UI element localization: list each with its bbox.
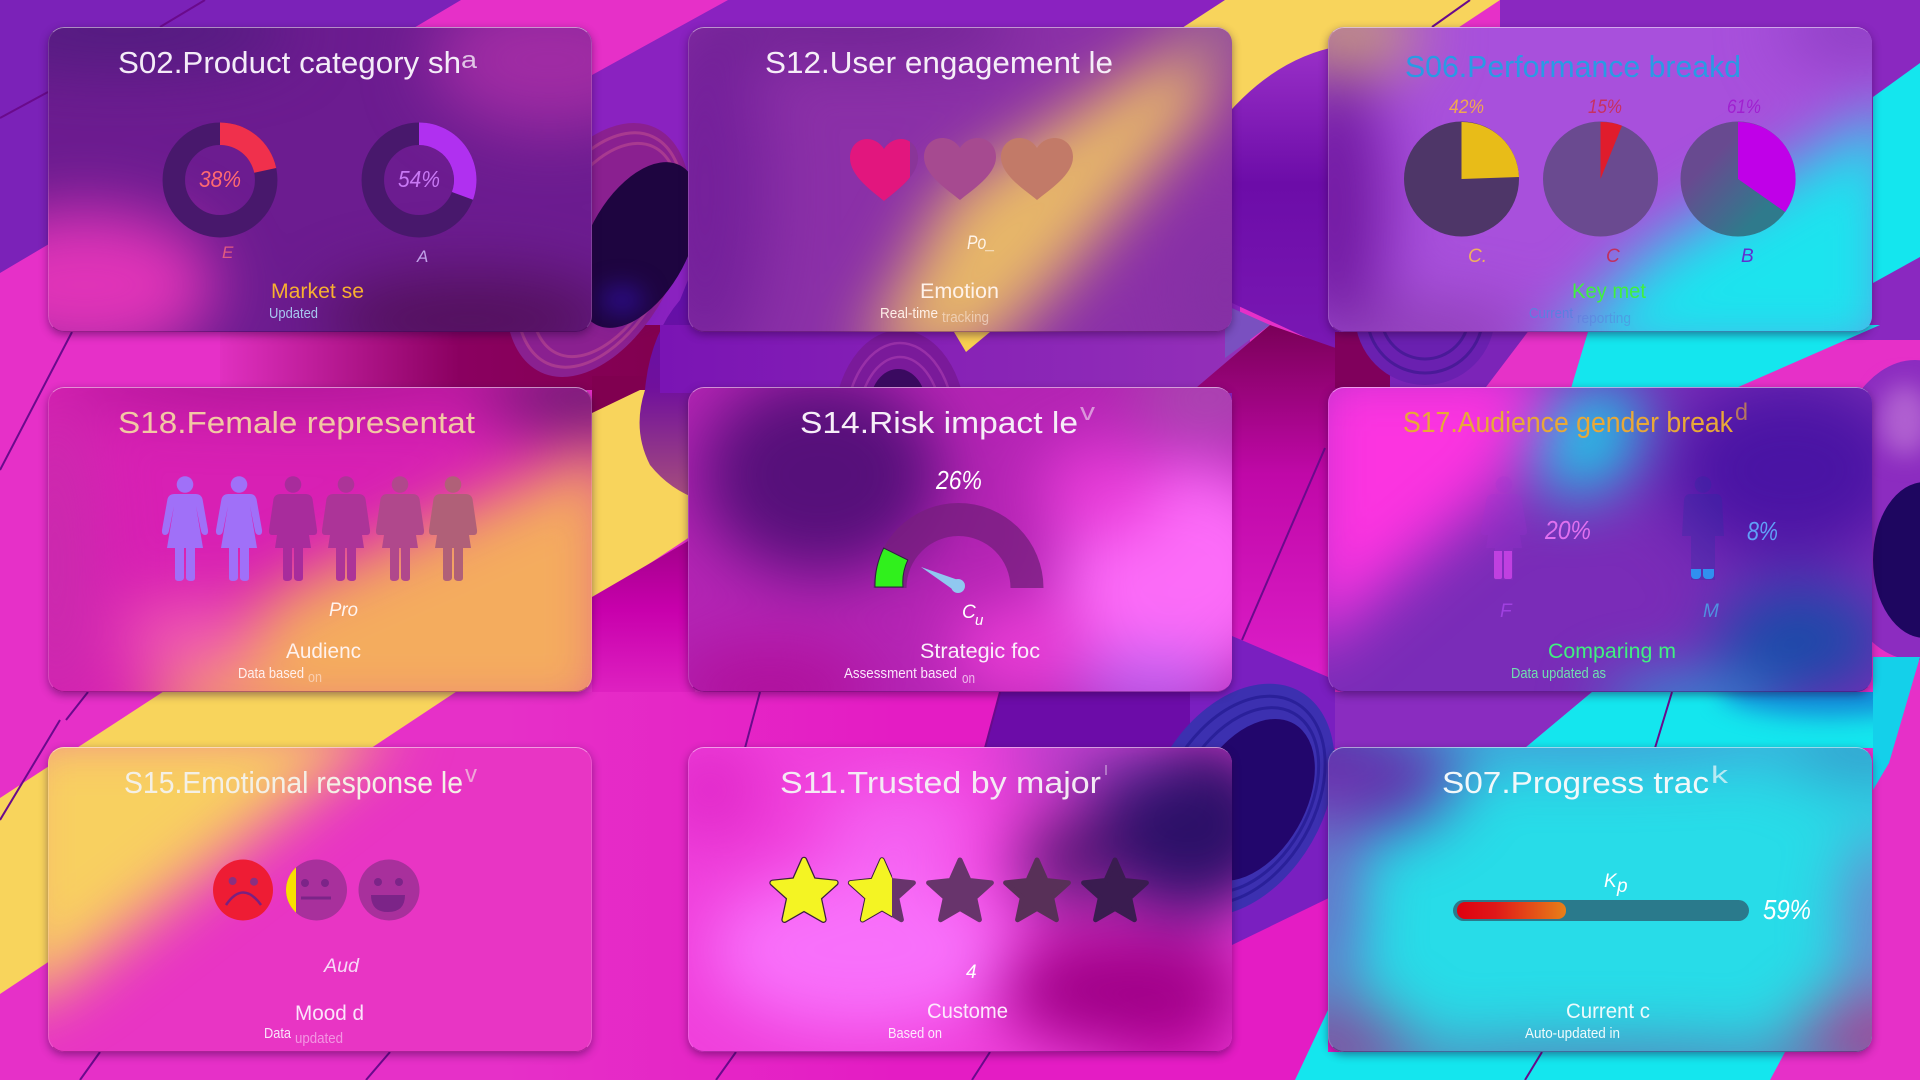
roll: arch behind S14 (834, 330, 966, 520)
footer text (888, 1000, 1008, 1042)
pie chart: 15%: C (1606, 246, 1620, 267)
icon: five star rating (773, 860, 1146, 920)
footer text: tracking (942, 310, 989, 326)
roll: upper right cylinder (1200, 46, 1420, 352)
title: S18.Female representat (118, 405, 475, 440)
pie chart: 42% (1404, 97, 1519, 267)
label: Aud (323, 956, 360, 977)
title: S14.Risk impact le (800, 405, 1078, 440)
footer text: Assessment based (844, 666, 957, 682)
footer text (264, 1002, 364, 1047)
pie chart: 42%: 42% (1449, 97, 1484, 118)
value: 59% (1763, 894, 1811, 925)
footer text: Custome (927, 1000, 1008, 1023)
footer text (1511, 640, 1676, 682)
footer text (269, 280, 364, 322)
donut chart: A 54%: 54% (398, 166, 440, 192)
label: M (1703, 601, 1719, 622)
gauge chart (874, 503, 1044, 593)
footer text: Based on (888, 1026, 942, 1042)
panel: S17 audience gender breakdown (1328, 387, 1872, 692)
footer text: on (962, 671, 975, 687)
title: v (465, 761, 477, 788)
panel: S12 user engagement (688, 27, 1232, 332)
footer text: Auto-updated in (1525, 1026, 1620, 1042)
label: F (1500, 601, 1513, 622)
donut chart: A 54% (373, 122, 476, 266)
title: S12.User engagement le (765, 45, 1113, 80)
footer text: Emotion (920, 280, 999, 303)
icon row: six female figures (162, 476, 477, 581)
label: Pro (329, 600, 358, 621)
footer text: Mood d (295, 1002, 364, 1025)
title: S17.Audience gender break (1403, 407, 1733, 439)
label: Po_ (967, 233, 995, 254)
footer text: Audienc (286, 640, 361, 663)
footer text: Current (1529, 306, 1573, 322)
footer text: Data based (238, 666, 304, 682)
pie chart: 61%: 61% (1727, 97, 1761, 118)
title: S15.Emotional response le (124, 765, 463, 800)
rings: upper right (1355, 245, 1495, 385)
title: S07.Progress trac (1442, 765, 1709, 800)
pie chart: 61%: B (1741, 246, 1754, 267)
title: S06.Performance breakd (1405, 49, 1741, 84)
donut chart: E 38%: 38% (199, 166, 241, 192)
label: K (1604, 871, 1618, 892)
footer text: Strategic foc (920, 640, 1040, 663)
icon: neutral face (286, 860, 347, 920)
footer text: Updated (269, 306, 318, 322)
title: S02.Product category sh (118, 45, 461, 80)
donut chart: E 38% (174, 122, 276, 262)
value: 20% (1544, 515, 1591, 545)
panel: S06 performance breakdown (1328, 27, 1872, 332)
label (962, 602, 984, 629)
label: p (1616, 876, 1628, 897)
icon: sad face (213, 860, 273, 920)
icon: three hearts (850, 138, 1073, 201)
footer text: Data updated as (1511, 666, 1606, 682)
footer text (844, 640, 1040, 687)
icon: male figure (1682, 476, 1724, 580)
gauge value: 26% (935, 465, 982, 495)
panel: S15 emotional response (48, 747, 592, 1052)
panel: S14 risk impact (688, 387, 1232, 692)
panel: S07 progress tracker (1328, 747, 1872, 1052)
footer text: Real-time (880, 306, 938, 322)
footer text: Key met (1572, 280, 1646, 303)
panel: S11 trusted by major (688, 747, 1232, 1052)
title: d (1735, 399, 1748, 426)
roll: lower centre with blue rings (1102, 636, 1374, 951)
panel: S02 product category share (48, 27, 592, 332)
footer text: updated (295, 1031, 343, 1047)
icon: female figure (1494, 551, 1512, 579)
pie chart: 15% (1543, 97, 1658, 267)
footer text: reporting (1577, 311, 1631, 327)
pie chart: 42%: C. (1468, 246, 1487, 267)
pie chart: 61% (1680, 97, 1796, 267)
footer text: Current c (1566, 1000, 1650, 1023)
footer text: Market se (271, 280, 364, 303)
footer text: on (308, 670, 322, 686)
value: 8% (1747, 516, 1778, 546)
icon: happy face (358, 860, 420, 920)
pie chart: 15%: 15% (1588, 97, 1622, 118)
footer text: Data (264, 1026, 292, 1042)
footer text (1525, 1000, 1650, 1042)
roll: left with rings (468, 94, 728, 406)
donut chart: A 54%: A (416, 247, 428, 266)
progress bar (1453, 900, 1749, 921)
footer text: Comparing m (1548, 640, 1676, 663)
label: C (962, 602, 976, 623)
title: v (1080, 399, 1095, 426)
label: 4 (966, 962, 977, 983)
footer text (1529, 280, 1646, 327)
label: u (975, 612, 984, 629)
donut chart: E 38%: E (222, 243, 234, 262)
title: a (461, 47, 478, 74)
roll: right edge (1825, 360, 1920, 660)
title: k (1711, 762, 1729, 789)
title: S11.Trusted by major (780, 765, 1101, 800)
footer text (880, 280, 999, 326)
label (1604, 871, 1628, 897)
roll: centre cylinder (640, 250, 700, 500)
footer text (238, 640, 361, 686)
panel: S18 female representation (48, 387, 592, 692)
